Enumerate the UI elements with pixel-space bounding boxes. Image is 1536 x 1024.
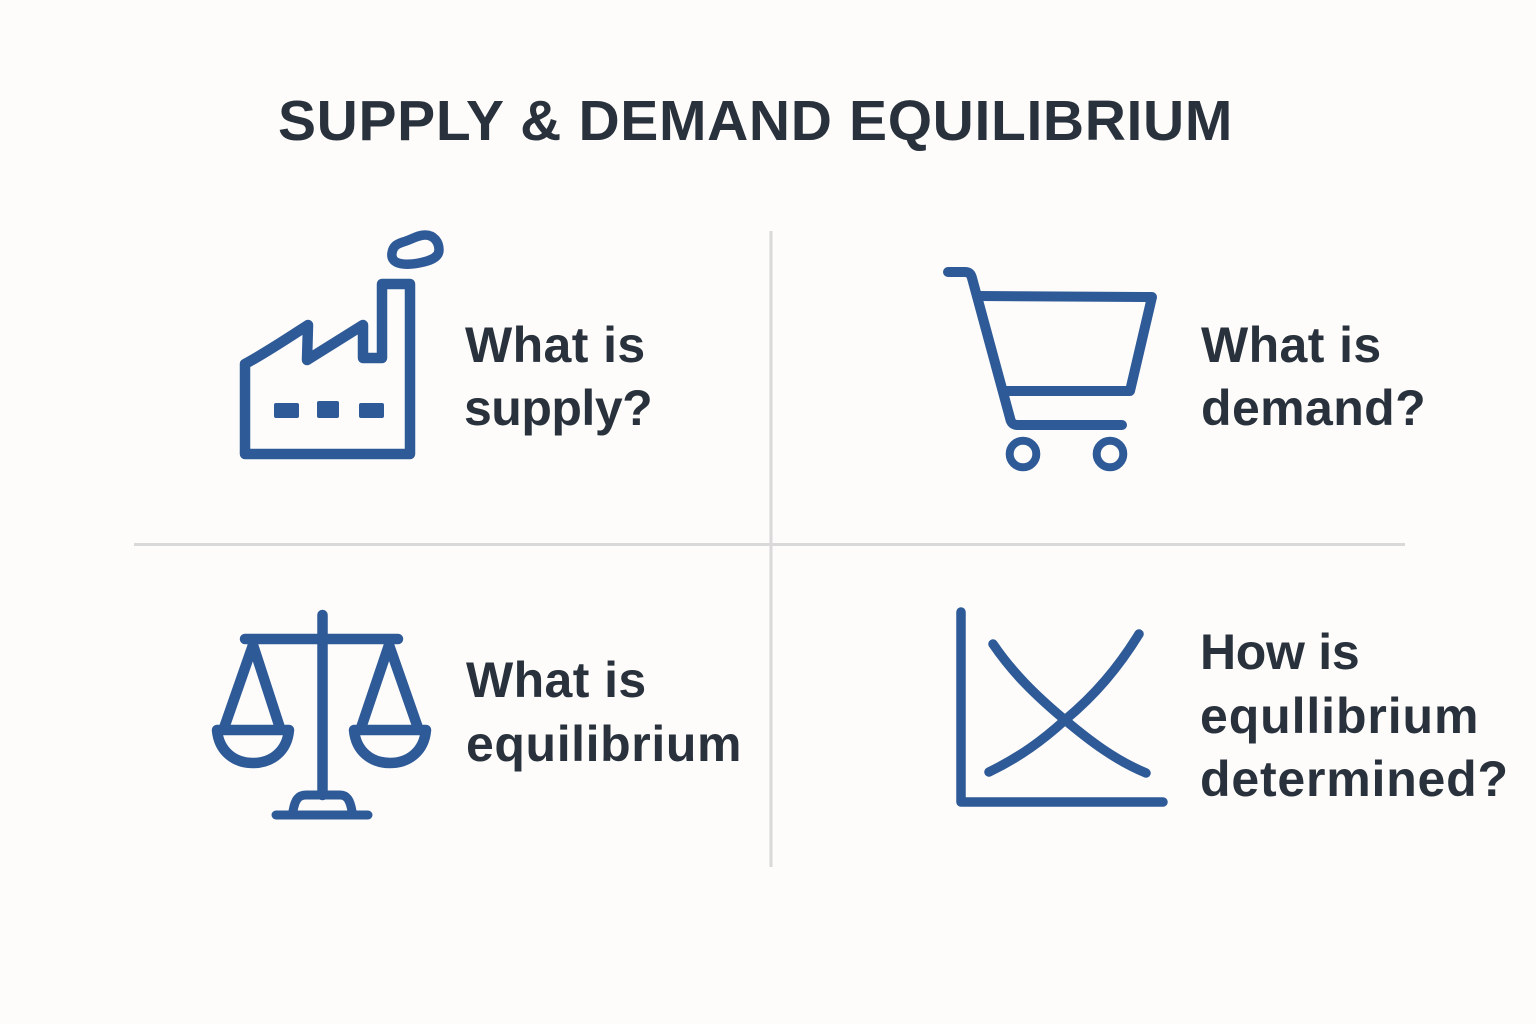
icon: factory xyxy=(240,230,444,460)
text: what is equilibrium: equilibrium xyxy=(466,716,742,772)
text: how is equilibrium determined xyxy=(1200,624,1509,807)
text: what is equilibrium xyxy=(466,652,742,772)
text: what is supply xyxy=(464,317,652,436)
icon: shopping cart xyxy=(943,267,1157,472)
text: what is supply: What is xyxy=(465,317,646,373)
text: how is equilibrium determined: How is xyxy=(1200,624,1359,680)
icon: supply and demand chart xyxy=(956,607,1168,807)
text: what is demand: demand? xyxy=(1201,380,1426,436)
text: what is supply: supply? xyxy=(464,380,652,436)
text: what is demand xyxy=(1201,317,1426,436)
icon: balance scale xyxy=(212,610,432,820)
text: what is demand: What is xyxy=(1201,317,1382,373)
text: how is equilibrium determined: determined? xyxy=(1200,751,1509,807)
text: what is equilibrium: What is xyxy=(466,652,647,708)
title: SUPPLY & DEMAND EQUILIBRIUM xyxy=(278,89,1233,153)
text: how is equilibrium determined: equllibrium xyxy=(1200,688,1479,744)
